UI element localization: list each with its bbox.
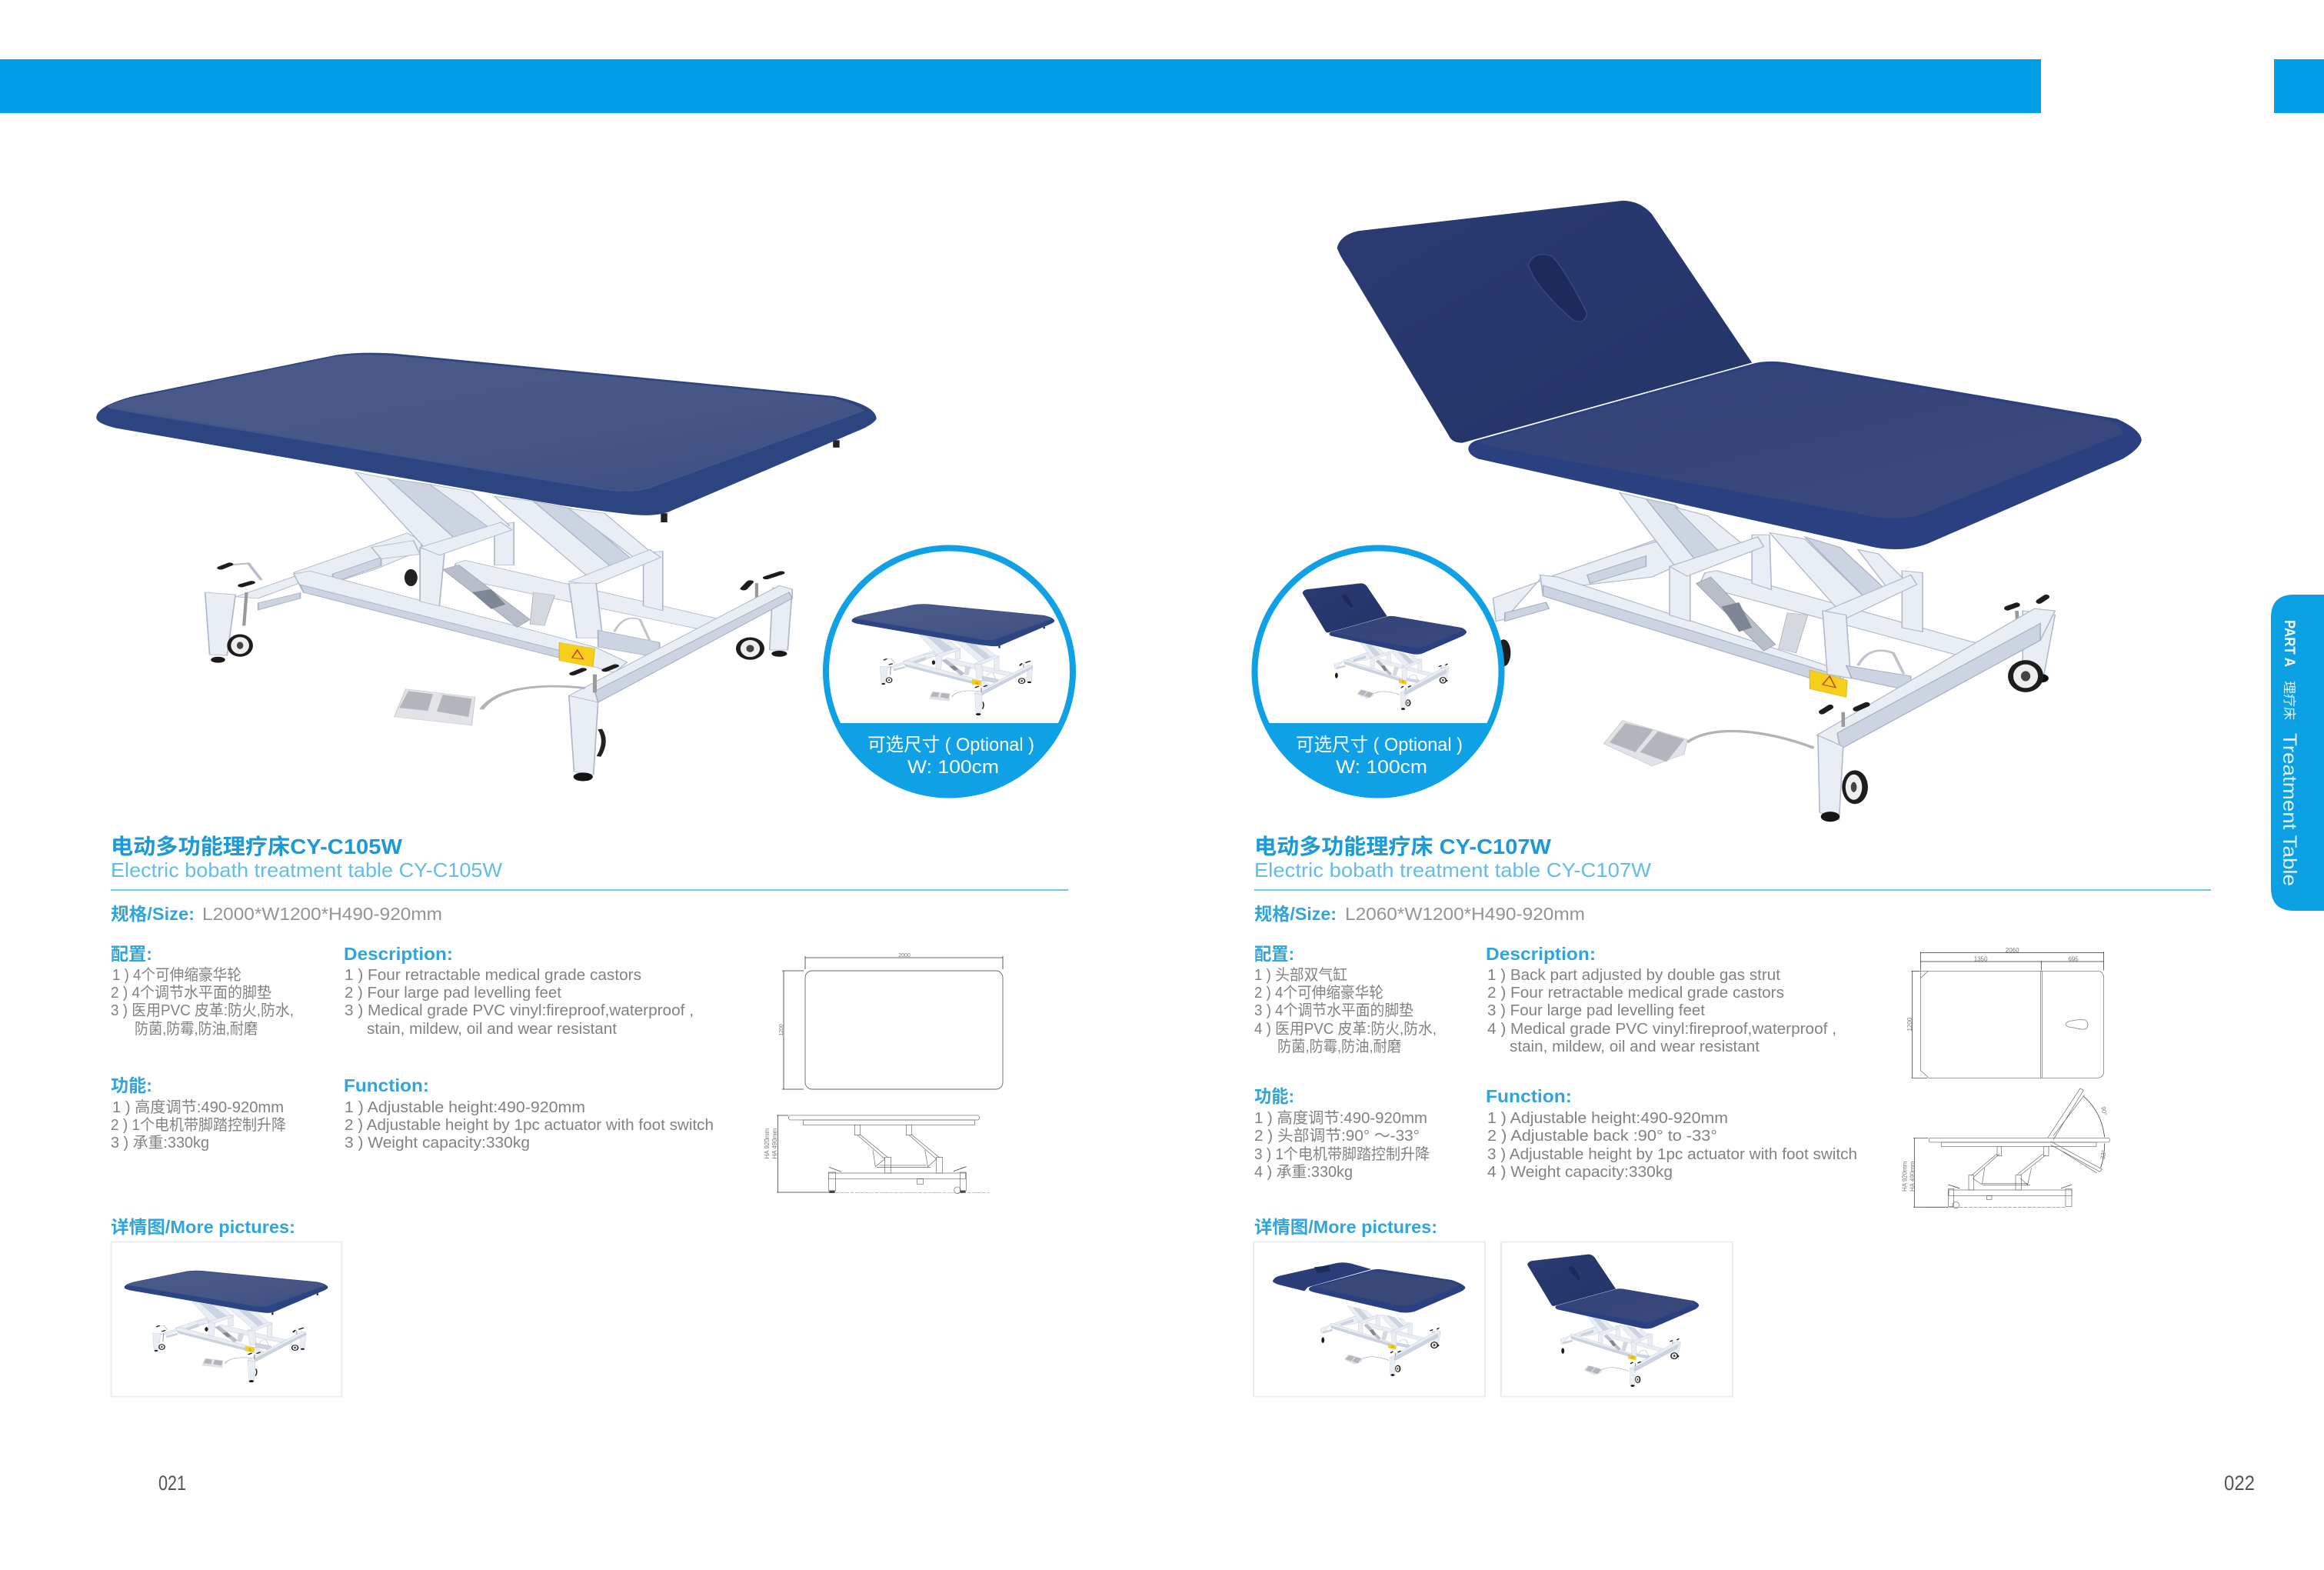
- technical drawing: side view CY-C105W: [764, 1115, 990, 1194]
- technical drawing: side view CY-C105W: HA 920mm: [764, 1128, 771, 1158]
- technical drawing: side view CY-C105W: HA 490mm: [771, 1128, 778, 1158]
- text block: function (Chinese): 4 ) 承重:330kg: [1254, 1163, 1353, 1181]
- thumbnail: raised backrest CY-C107W: [1501, 1242, 1733, 1397]
- size specification: [1254, 904, 1585, 924]
- size specification: 规格/Size:: [111, 904, 195, 924]
- text block: description (English): [1486, 944, 1836, 1055]
- text block: description (English): 2 ) Four large pad levelling feet: [345, 985, 561, 1002]
- text block: function (Chinese): 1 ) 高度调节:490-920mm: [1254, 1109, 1427, 1127]
- text block: description (English): Description:: [1486, 944, 1596, 964]
- size specification: 规格/Size:: [1254, 904, 1337, 924]
- heading: more pictures: 详情图/More pictures:: [1254, 1217, 1437, 1237]
- side tab: section label: [2271, 595, 2324, 911]
- text block: description (English): Description:: [344, 944, 453, 964]
- text block: configuration (Chinese): 1 ) 4个可伸缩豪华轮: [112, 966, 241, 984]
- text block: function (Chinese): 2 ) 头部调节:90° ～-33°: [1254, 1127, 1420, 1145]
- inset circle: optional size, CY-C107W: 可选尺寸 ( Optional ): [1296, 735, 1463, 755]
- inset circle: optional size, CY-C105W: W: 100cm: [907, 757, 999, 778]
- thumbnail: CY-C105W: [111, 1242, 341, 1397]
- thumbnail: flat table CY-C107W: [1254, 1242, 1485, 1397]
- text block: configuration (Chinese): 1 ) 头部双气缸: [1254, 966, 1347, 984]
- technical drawing: plan view CY-C107W: 1200: [1906, 1017, 1913, 1032]
- text block: configuration (Chinese): 2 ) 4个调节水平面的脚垫: [111, 984, 271, 1002]
- text block: description (English): [344, 944, 694, 1038]
- text block: function (English): 3 ) Weight capacity:330kg: [345, 1135, 530, 1152]
- technical drawing: plan view CY-C107W: [1906, 947, 2104, 1078]
- inset circle: optional size, CY-C107W: [1252, 545, 1504, 798]
- heading: Chinese product title: 电动多功能理疗床 CY-C107W: [1254, 835, 1552, 858]
- text block: function (English): Function:: [1486, 1086, 1572, 1106]
- text block: function (Chinese): [1254, 1086, 1430, 1181]
- text block: function (Chinese): 功能:: [111, 1075, 152, 1095]
- technical drawing: plan view CY-C105W: 1200: [779, 1024, 784, 1036]
- text block: configuration (Chinese): 防菌,防霉,防油,耐磨: [135, 1020, 258, 1038]
- text block: function (English): 3 ) Adjustable height by 1pc actuator with foot switch: [1487, 1146, 1857, 1163]
- inset circle: optional size, CY-C105W: 可选尺寸 ( Optional ): [867, 735, 1034, 755]
- inset circle: optional size, CY-C107W: W: 100cm: [1336, 757, 1427, 778]
- panel: product CY-C107W: [1252, 201, 2255, 1495]
- page number 021: 021: [158, 1472, 186, 1495]
- text block: description (English): 3 ) Four large pad levelling feet: [1487, 1002, 1705, 1019]
- page number 022: 022: [2224, 1472, 2255, 1495]
- text block: configuration (Chinese): 4 ) 医用PVC 皮革:防火,防水,: [1254, 1020, 1437, 1038]
- heading: English product title: Electric bobath treatment table CY-C105W: [111, 858, 502, 882]
- side tab: section label: Treatment Table: [2279, 733, 2300, 886]
- size specification: [111, 904, 442, 924]
- technical drawing: plan view CY-C105W: [779, 953, 1003, 1089]
- technical drawing: side view CY-C107W: 90°: [2099, 1106, 2108, 1116]
- text block: function (English): 2 ) Adjustable height by 1pc actuator with foot switch: [345, 1117, 714, 1134]
- text block: configuration (Chinese): 3 ) 4个调节水平面的脚垫: [1254, 1002, 1413, 1019]
- technical drawing: plan view CY-C107W: 1350: [1974, 956, 1988, 963]
- technical drawing: side view CY-C107W: [1901, 1088, 2109, 1208]
- text block: configuration (Chinese): [111, 944, 294, 1038]
- top banner bar right: [2274, 59, 2324, 113]
- text block: function (Chinese): 功能:: [1254, 1086, 1294, 1106]
- side tab: section label: 理疗床: [2282, 681, 2296, 720]
- text block: description (English): 2 ) Four retractable medical grade castors: [1487, 985, 1784, 1002]
- product photo: CY-C105W table: [96, 353, 877, 781]
- technical drawing: plan view CY-C105W: 2000: [898, 953, 911, 958]
- text block: configuration (Chinese): 配置:: [1254, 944, 1294, 964]
- heading: English product title: Electric bobath treatment table CY-C107W: [1254, 858, 1651, 882]
- text block: function (Chinese): 3 ) 1个电机带脚踏控制升降: [1254, 1145, 1430, 1163]
- text block: description (English): 1 ) Back part adjusted by double gas strut: [1487, 967, 1780, 984]
- size specification: L2060*W1200*H490-920mm: [1345, 904, 1585, 924]
- text block: function (English): [1486, 1086, 1857, 1181]
- panel: product CY-C105W: [96, 353, 1075, 1495]
- technical drawing: side view CY-C107W: HA 920mm: [1901, 1161, 1908, 1192]
- technical drawing: plan view CY-C107W: 695: [2068, 956, 2079, 963]
- text block: description (English): 1 ) Four retractable medical grade castors: [345, 967, 641, 984]
- text block: description (English): 4 ) Medical grade PVC vinyl:fireproof,waterproof ,: [1487, 1021, 1836, 1038]
- text block: function (English): 2 ) Adjustable back :90° to -33°: [1487, 1128, 1717, 1145]
- text block: function (English): Function:: [344, 1075, 429, 1095]
- text block: function (English): 1 ) Adjustable height:490-920mm: [1487, 1110, 1728, 1127]
- text block: description (English): 3 ) Medical grade PVC vinyl:fireproof,waterproof ,: [345, 1002, 694, 1019]
- text block: function (Chinese): 1 ) 高度调节:490-920mm: [112, 1098, 284, 1116]
- technical drawing: plan view CY-C107W: 2060: [2006, 947, 2019, 954]
- text block: description (English): stain, mildew, oil and wear resistant: [1510, 1038, 1760, 1055]
- text block: function (Chinese): [111, 1075, 286, 1152]
- text block: configuration (Chinese): 3 ) 医用PVC 皮革:防火,防水,: [111, 1002, 294, 1019]
- inset circle: optional size, CY-C105W: [823, 545, 1075, 798]
- heading: Chinese product title: 电动多功能理疗床CY-C105W: [111, 835, 403, 858]
- size specification: L2000*W1200*H490-920mm: [202, 904, 442, 924]
- text block: function (English): 4 ) Weight capacity:330kg: [1487, 1164, 1673, 1181]
- text block: function (English): 1 ) Adjustable height:490-920mm: [345, 1099, 585, 1116]
- technical drawing: side view CY-C107W: 33°: [2099, 1149, 2108, 1160]
- text block: description (English): stain, mildew, oil and wear resistant: [367, 1021, 617, 1038]
- product photo: CY-C107W table: [1337, 201, 2142, 822]
- side tab: section label: PART A: [2281, 620, 2297, 667]
- text block: configuration (Chinese): 配置:: [111, 944, 152, 964]
- text block: configuration (Chinese): [1254, 944, 1437, 1055]
- heading: more pictures: 详情图/More pictures:: [111, 1217, 295, 1237]
- text block: function (Chinese): 3 ) 承重:330kg: [111, 1134, 209, 1152]
- top banner bar left: [0, 59, 2041, 113]
- technical drawing: side view CY-C107W: HA 490mm: [1909, 1161, 1916, 1192]
- text block: function (English): [344, 1075, 714, 1152]
- text block: function (Chinese): 2 ) 1个电机带脚踏控制升降: [111, 1116, 286, 1134]
- text block: configuration (Chinese): 防菌,防霉,防油,耐磨: [1277, 1038, 1401, 1055]
- text block: configuration (Chinese): 2 ) 4个可伸缩豪华轮: [1254, 984, 1383, 1002]
